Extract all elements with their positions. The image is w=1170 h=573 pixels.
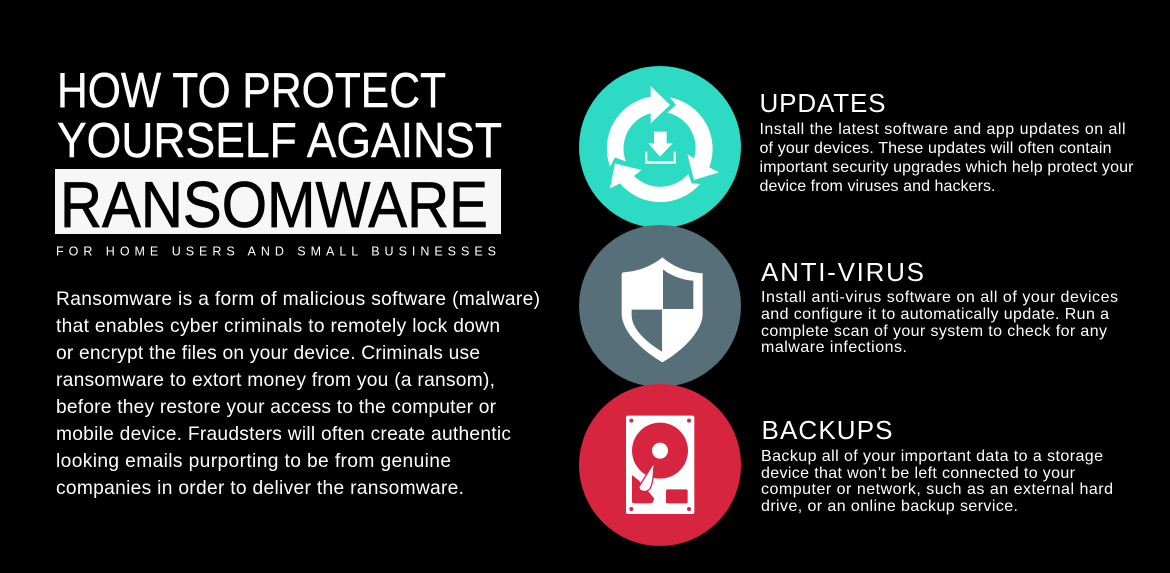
text: backups description: device that won’t be left connected to your (761, 465, 1076, 482)
text: backups description: drive, or an online backup service. (761, 498, 1018, 515)
intro paragraph: ransomware to extort money from you (a ransom), (56, 370, 495, 391)
text: updates description: of your devices. These updates will often contain (760, 140, 1112, 157)
text: updates description: device from viruses and hackers. (760, 178, 996, 195)
intro paragraph: mobile device. Fraudsters will often create authentic (56, 424, 511, 445)
text: anti-virus description: and configure it to automatically update. Run a (761, 306, 1109, 323)
intro paragraph: Ransomware is a form of malicious software (malware) (56, 289, 540, 310)
title: YOURSELF AGAINST (57, 114, 502, 168)
text: updates description (760, 121, 1134, 195)
section: backups (761, 415, 1113, 515)
subtitle: FOR HOME USERS AND SMALL BUSINESSES (56, 244, 496, 258)
circle: anti-virus (579, 225, 741, 387)
text: anti-virus description: malware infections. (761, 339, 907, 356)
intro paragraph: companies in order to deliver the ransomware. (56, 478, 464, 499)
intro paragraph: that enables cyber criminals to remotely lock down (56, 316, 500, 337)
text: anti-virus description: complete scan of your system to check for any (761, 323, 1107, 340)
icon: refresh arrows with download (607, 86, 719, 202)
text: backups description (761, 448, 1113, 515)
section: anti-virus (761, 257, 1118, 356)
intro paragraph: before they restore your access to the computer or (56, 397, 497, 418)
circle: backups (579, 384, 741, 546)
section: updates (760, 88, 1134, 195)
title: HOW TO PROTECT (57, 64, 446, 118)
intro paragraph (56, 289, 540, 499)
text: backups description: Backup all of your important data to a storage (761, 448, 1103, 465)
heading: backups: BACKUPS (762, 415, 892, 445)
text: backups description: computer or network, such as an external hard (761, 481, 1113, 498)
text: anti-virus description: Install anti-virus software on all of your devices (761, 289, 1118, 306)
heading: anti-virus: ANTI-VIRUS (761, 257, 924, 287)
intro paragraph: or encrypt the files on your device. Criminals use (56, 343, 480, 364)
text: anti-virus description (761, 289, 1118, 356)
heading: updates: UPDATES (760, 88, 886, 118)
icon: shield (622, 257, 703, 362)
intro paragraph: looking emails purporting to be from genuine (56, 451, 451, 472)
text: updates description: Install the latest software and app updates on all (760, 121, 1126, 138)
title highlight: ransomware: RANSOMWARE (60, 168, 488, 241)
title (57, 64, 502, 168)
circle: updates (579, 66, 741, 228)
icon: hard drive (626, 416, 694, 514)
text: updates description: important security upgrades which help protect your (760, 159, 1134, 176)
